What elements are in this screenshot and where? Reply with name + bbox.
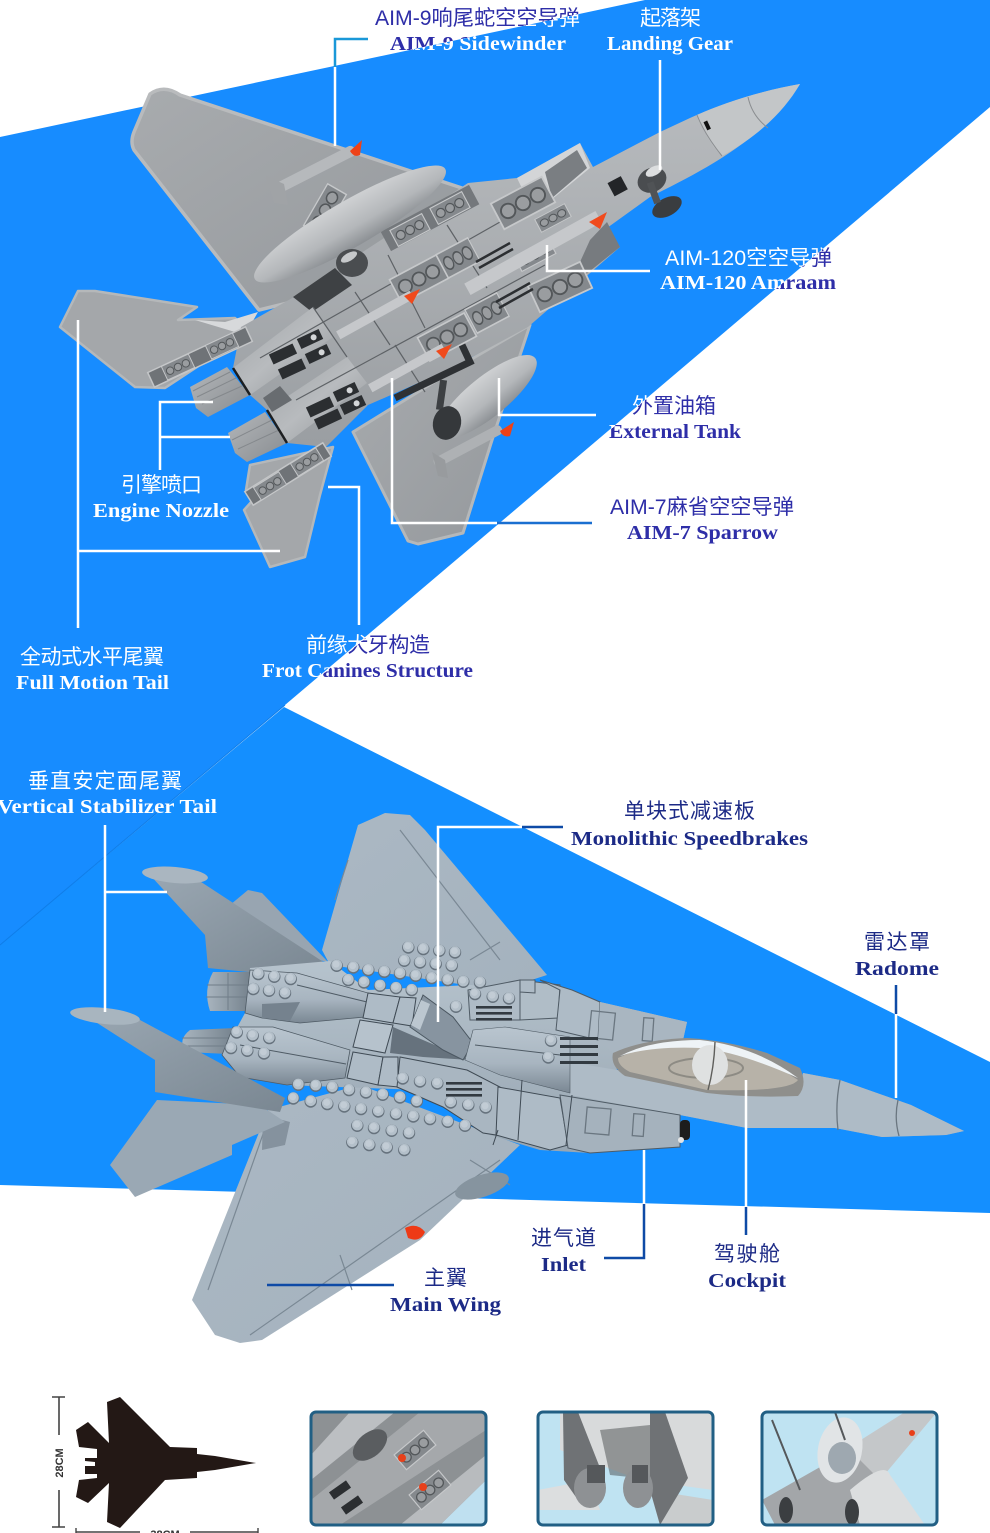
speedbrake [410, 995, 473, 1060]
lower forward panels [397, 1057, 680, 1153]
lower intake ramp [580, 222, 620, 275]
main landing gear [336, 249, 470, 443]
label: canines: 前缘犬牙构造 [306, 634, 430, 657]
label: AIM-120: AIM-120空空导弹 [665, 247, 832, 270]
height dimension [52, 1397, 66, 1527]
line: AIM-7 [392, 378, 592, 523]
thumbnail: tail detail [538, 1412, 713, 1525]
fuselage [233, 84, 800, 447]
stud plates [304, 177, 592, 361]
label: full motion tail: Full Motion Tail [16, 672, 169, 694]
dark gap between ducts [263, 386, 292, 412]
fuselage side below canopy [570, 1062, 964, 1137]
fuselage base [222, 961, 964, 1153]
label: vertical stabilizer [0, 770, 217, 818]
dark vents [269, 176, 628, 429]
external tank upper [243, 149, 457, 299]
external tank lower [426, 342, 548, 452]
label: cockpit [708, 1243, 786, 1292]
engine nozzle two [228, 412, 287, 462]
label: external tank: External Tank [609, 421, 742, 443]
line: external tank [499, 378, 596, 415]
label: cockpit: 驾驶舱 [714, 1243, 780, 1266]
lower wing [192, 1085, 520, 1343]
label: canines [262, 634, 473, 682]
label: radome: Radome [855, 958, 939, 980]
panel lines [260, 222, 545, 400]
canopy [612, 1038, 804, 1097]
label: inlet: 进气道 [531, 1227, 596, 1250]
wing panel lines [208, 830, 510, 1335]
label: speedbrakes: Monolithic Speedbrakes [571, 828, 808, 850]
label: engine nozzle: 引擎喷口 [121, 474, 202, 497]
label: canines: Frot Canines Structure [262, 660, 473, 682]
vertical stabilizer lower [69, 1004, 285, 1112]
label: main wing: 主翼 [424, 1267, 467, 1290]
label: vertical stabilizer: 垂直安定面尾翼 [28, 770, 182, 793]
lower wing [353, 325, 530, 544]
line: canines [328, 487, 359, 625]
engine duct one [233, 307, 333, 395]
thumbnail: cockpit detail [762, 1412, 937, 1525]
label: AIM-7: AIM-7麻省空空导弹 [610, 496, 794, 519]
striped vents [446, 1006, 598, 1097]
AIM-9 missile upper [266, 140, 362, 205]
engine nozzle upper [206, 972, 250, 1011]
label: full motion tail: 全动式水平尾翼 [20, 646, 164, 669]
nose panel lines [697, 97, 768, 156]
label: AIM-9 [375, 7, 580, 55]
label: inlet [531, 1227, 596, 1276]
nose landing gear [633, 162, 685, 222]
engine duct lower [222, 1027, 350, 1085]
label: full motion tail [16, 646, 169, 694]
label: AIM-7: AIM-7 Sparrow [627, 522, 779, 544]
line: radome [895, 985, 897, 1098]
line: AIM-9 [335, 39, 368, 146]
lower tail [244, 447, 333, 567]
line: engine nozzle [160, 402, 230, 470]
label: inlet: Inlet [541, 1254, 586, 1276]
wing root shade [262, 1115, 290, 1150]
tail stud strips [148, 327, 331, 505]
line: full motion tail [78, 320, 280, 628]
dark gear bay [293, 268, 352, 312]
label: engine nozzle: Engine Nozzle [93, 500, 229, 522]
label: main wing [390, 1267, 501, 1316]
label: engine nozzle [93, 474, 229, 522]
engine nozzle lower [182, 1028, 235, 1054]
label: AIM-9: AIM-9响尾蛇空空导弹 [375, 7, 580, 30]
nose gear [678, 1120, 690, 1143]
width dimension [76, 1528, 258, 1533]
forward upper panels [468, 980, 687, 1053]
line: landing gear [659, 60, 661, 170]
line: main wing [267, 1284, 394, 1286]
duct joints [233, 368, 287, 443]
line: AIM-120 [547, 245, 650, 271]
line: speedbrakes [438, 827, 563, 1022]
upper tail [60, 291, 250, 388]
leader lines [78, 39, 896, 1285]
vertical stabilizer upper [141, 864, 328, 975]
centre boxes [347, 993, 416, 1087]
label: external tank: 外置油箱 [632, 395, 716, 418]
label: speedbrakes: 单块式减速板 [624, 800, 755, 823]
AIM-9 missile lower [432, 422, 514, 478]
lower drop tank and missile tip [405, 1167, 512, 1240]
engine nozzle one [190, 367, 250, 417]
silhouette [76, 1397, 256, 1528]
lego studs [225, 941, 557, 1156]
vertical stabilizer upper back [230, 890, 328, 962]
upper intake ramp [517, 143, 590, 205]
label: main wing: Main Wing [390, 1294, 501, 1316]
label: speedbrakes [571, 800, 808, 850]
centre dark gap [390, 1027, 470, 1060]
label: landing gear [607, 7, 733, 55]
label: vertical stabilizer: Vertical Stabilizer Tail [0, 796, 217, 818]
AIM-120 missile rails [336, 211, 602, 392]
striped vents [476, 243, 533, 308]
upper wing [132, 89, 468, 310]
label: landing gear: 起落架 [640, 7, 701, 30]
top aircraft [60, 84, 800, 567]
label: landing gear: Landing Gear [607, 33, 733, 55]
height dimension: 28CM [54, 1448, 66, 1478]
white tail root highlight [195, 312, 258, 335]
missile noses [404, 212, 607, 359]
label: cockpit: Cockpit [708, 1270, 786, 1292]
forward duct [465, 1027, 570, 1093]
label: AIM-120: AIM-120 Amraam [660, 272, 836, 294]
bottom aircraft [69, 813, 964, 1343]
engine duct two [267, 357, 367, 443]
label: AIM-7 [610, 496, 794, 544]
label: AIM-120 [660, 247, 836, 294]
line: inlet [604, 1150, 644, 1258]
label: AIM-9: AIM-9 Sidewinder [390, 33, 566, 55]
label: external tank [609, 395, 742, 443]
line: cockpit [745, 1080, 747, 1235]
small panel outlines [585, 1011, 899, 1136]
label: radome: 雷达罩 [864, 931, 930, 954]
label: radome [855, 931, 939, 980]
horizontal tail [110, 1100, 285, 1197]
engine duct upper [245, 970, 368, 1023]
nose cone [697, 84, 800, 156]
wing stud band [381, 185, 479, 251]
size diagram [52, 1397, 258, 1533]
thumbnail: missiles detail [311, 1412, 486, 1525]
line: vertical stabilizer [105, 825, 167, 1012]
upper wing [322, 813, 547, 990]
